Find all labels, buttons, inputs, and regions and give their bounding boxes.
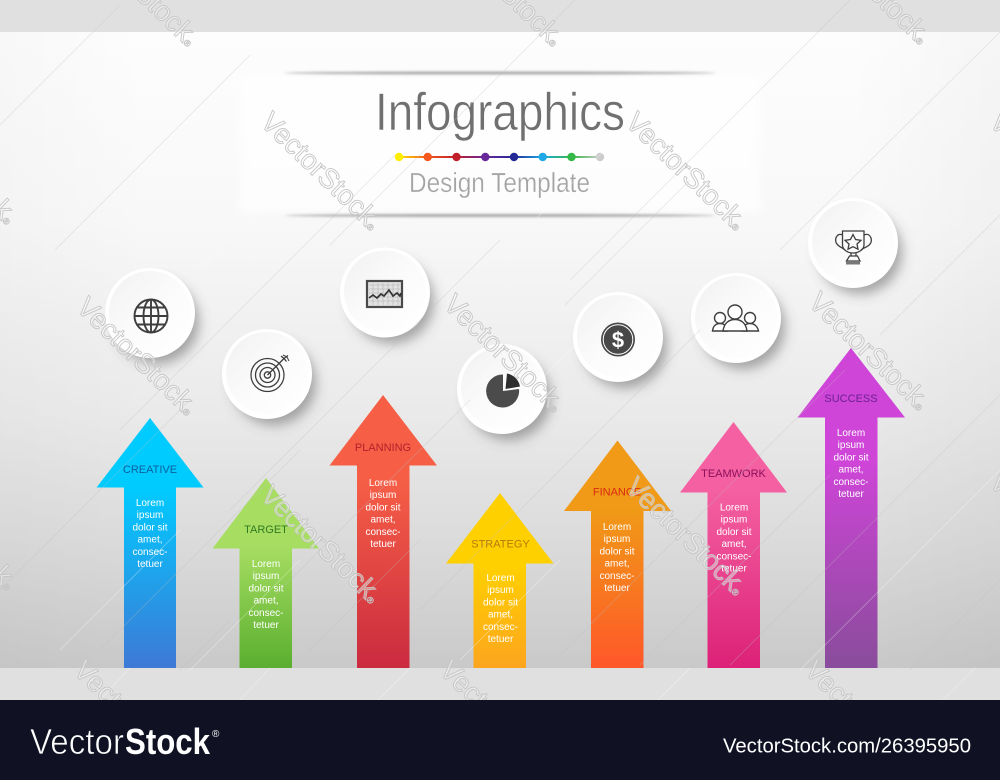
arrow: success: ipsum: [838, 440, 864, 451]
footer logo: ®: [212, 729, 220, 740]
icon: pie chart: [486, 374, 520, 407]
arrow: teamwork: consec-: [716, 551, 752, 562]
subtitle: Design Template: [409, 167, 590, 198]
arrow: finance: amet,: [604, 559, 630, 570]
footer bar: [0, 700, 1000, 780]
panel top shadow: [284, 72, 716, 74]
arrow: creative: [96, 418, 204, 668]
arrow: success: tetuer: [838, 489, 864, 500]
arrow: finance: [564, 440, 671, 668]
watermarks: VectorStock®: [71, 291, 204, 421]
arrow: teamwork: [680, 422, 787, 668]
arrow: target: ipsum: [253, 571, 279, 582]
watermarks: VectorStock®: [68, 654, 201, 780]
icon: dollar coin: $: [612, 328, 624, 352]
arrow: finance: ipsum: [604, 534, 630, 545]
icon: trophy: [836, 231, 871, 264]
circle: chart: [340, 248, 434, 344]
arrow: creative: ipsum: [137, 510, 163, 521]
watermarks: VectorStock®: [255, 479, 388, 609]
arrow: teamwork: dolor sit: [716, 527, 752, 538]
panel background: [240, 76, 760, 212]
arrow: teamwork: tetuer: [721, 564, 747, 574]
arrow: creative: CREATIVE: [123, 464, 177, 476]
circle: pie: [457, 344, 551, 440]
top band: [0, 0, 1000, 32]
arrow: success: consec-: [833, 477, 869, 488]
colored dot line: [395, 153, 604, 161]
arrow: creative: Lorem: [136, 498, 164, 509]
panel bottom shadow: [284, 214, 716, 217]
floor strip: [0, 668, 1000, 700]
arrow: strategy: STRATEGY: [471, 538, 530, 550]
title panel: [240, 72, 760, 217]
title: Infographics: [375, 83, 625, 142]
watermarks: VectorStock®: [438, 288, 571, 418]
arrow: finance: FINANCE: [593, 486, 641, 498]
footer image id: VectorStock.com/26395950: [723, 736, 971, 758]
arrow: strategy: Lorem: [486, 573, 515, 584]
arrow: strategy: tetuer: [488, 634, 514, 645]
arrow: success: [798, 348, 905, 668]
arrow: planning: PLANNING: [355, 442, 411, 454]
arrow: finance: consec-: [599, 571, 635, 582]
watermarks: VectorStock®: [255, 106, 388, 236]
circle: dollar: [573, 292, 667, 388]
arrow: strategy: consec-: [483, 622, 518, 633]
arrow: planning: ipsum: [370, 490, 396, 501]
arrow: success: amet,: [838, 465, 864, 476]
arrow: strategy: [446, 493, 554, 668]
watermarks: VectorStock®: [799, 654, 932, 780]
footer logo: Stock: [125, 721, 211, 762]
watermarks: VectorStock®: [803, 286, 936, 416]
watermarks: VectorStock®: [620, 106, 753, 236]
arrow: finance: dolor sit: [599, 546, 635, 557]
footer logo: [30, 721, 220, 762]
arrow: target: dolor sit: [248, 583, 284, 594]
arrow: planning: [330, 395, 437, 668]
arrow: finance: Lorem: [603, 522, 631, 533]
arrow: creative: tetuer: [137, 559, 163, 570]
arrow: teamwork: Lorem: [720, 502, 748, 514]
arrow: success: SUCCESS: [824, 393, 878, 405]
arrow: planning: tetuer: [370, 539, 396, 550]
watermarks: VectorStock®: [620, 471, 753, 601]
arrow: planning: Lorem: [369, 478, 397, 489]
arrow: target: consec-: [248, 608, 284, 619]
arrow: strategy: dolor sit: [483, 597, 518, 608]
arrow: strategy: ipsum: [487, 585, 514, 596]
arrow: strategy: amet,: [488, 610, 513, 621]
arrow: finance: tetuer: [604, 583, 630, 594]
arrow: planning: dolor sit: [365, 502, 401, 513]
arrow: teamwork: ipsum: [721, 515, 747, 526]
icon: line chart: [367, 281, 402, 307]
footer logo: Vector: [30, 721, 124, 762]
arrow: target: amet,: [253, 596, 279, 607]
circle: target: [222, 329, 316, 425]
icon: target with arrow: [251, 355, 289, 392]
arrow: teamwork: TEAMWORK: [701, 468, 767, 480]
arrow: teamwork: amet,: [721, 539, 747, 550]
arrow: planning: consec-: [365, 527, 401, 538]
circle: trophy: [808, 198, 902, 294]
circle: globe: [105, 268, 199, 364]
circle: team: [691, 273, 785, 369]
arrow: target: tetuer: [253, 620, 279, 631]
arrow: creative: dolor sit: [132, 522, 168, 533]
arrow: planning: amet,: [370, 515, 396, 526]
arrow: creative: consec-: [132, 547, 168, 558]
arrow: target: [212, 478, 319, 668]
arrow: success: dolor sit: [833, 452, 869, 463]
arrow: creative: amet,: [137, 535, 163, 546]
watermarks: VectorStock®: [434, 654, 567, 780]
arrow: target: Lorem: [252, 559, 280, 570]
arrow: success: Lorem: [837, 428, 865, 439]
icon: globe: [134, 300, 168, 332]
arrow: target: TARGET: [244, 524, 288, 536]
icon: people: [712, 305, 758, 331]
